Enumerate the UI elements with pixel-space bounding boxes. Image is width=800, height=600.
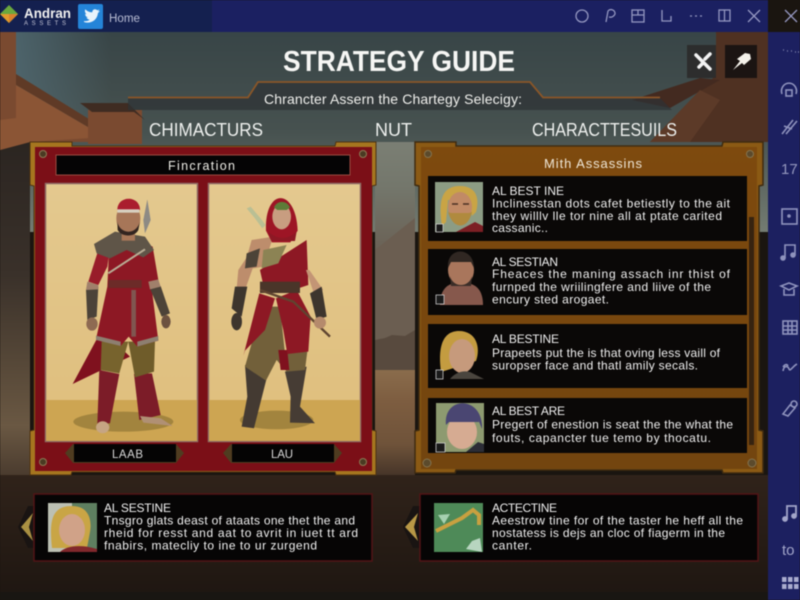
row 1: they willlv lle tor nine all at ptate carited [492, 209, 722, 223]
scrollbar [749, 217, 754, 445]
item image: golden tool [434, 503, 483, 552]
home link: Home [109, 13, 140, 25]
subtitle banner [128, 82, 672, 110]
action button: tools [687, 45, 716, 78]
row 2 [428, 249, 747, 315]
row 1: cassanic.. [492, 221, 548, 235]
column heading center: NUT [375, 119, 412, 140]
portrait 2 [436, 252, 483, 305]
figure: male assassin [73, 199, 173, 433]
row 2: AL SESTIAN [492, 255, 558, 269]
callout: right: ACTECTINE [492, 501, 557, 515]
action button: pin [725, 45, 757, 78]
portrait [48, 503, 97, 552]
icon: grid [783, 321, 797, 334]
name plate: LAU [223, 444, 342, 463]
icon: cap [781, 283, 797, 295]
row 4: Pregert of enestion is seat the the what the [492, 418, 733, 432]
toolbar icons [576, 10, 797, 22]
row 3: AL BESTINE [492, 332, 559, 346]
character card: left [46, 184, 198, 442]
brand name: ASSETS [24, 21, 66, 27]
icon: music note [781, 245, 795, 260]
corner rivets [423, 150, 756, 467]
twitter icon [78, 4, 103, 29]
panel frame [30, 142, 376, 475]
arrow right [403, 506, 420, 548]
callout: left: Tnsgro glats deast of ataats one thet the and [104, 514, 355, 528]
panel header: Fincration [168, 159, 235, 173]
row 2: encury sted arogaet. [492, 292, 609, 306]
logo icon [0, 5, 18, 23]
column heading right: CHARACTTESUILS [532, 119, 677, 140]
row 1 [428, 176, 747, 241]
row 1: Inclinesstan dots cafet betiestly to the ait [492, 196, 731, 210]
panel header [56, 155, 350, 175]
brand name: Andran [24, 5, 71, 21]
icon: microphone [783, 401, 797, 416]
subtitle banner: Chrancter Assern the Chartegy Selecigy: [264, 91, 522, 107]
sidebar dots [783, 50, 799, 52]
icon: wave [783, 364, 797, 371]
calendar number: 17 [781, 161, 798, 178]
callout: right: canter. [492, 538, 532, 552]
callout: right: Aeestrow tine for of the taster he heff all the [492, 514, 743, 528]
top bar [0, 0, 797, 32]
character card: right [208, 184, 360, 442]
row 3: Prapeets put the is that oving less vaill of [492, 346, 721, 360]
column heading left: CHIMACTURS [149, 119, 263, 140]
callout: left [18, 494, 372, 561]
row 1: AL BEST INE [492, 184, 564, 198]
callout: right: nostatess is dejs an cloc of fiagerm in the [492, 526, 725, 540]
callout: left: fnabirs, matecliy to ine to ur zurgend [104, 538, 317, 552]
row 3: suropser face and thatl amily secals. [492, 358, 698, 372]
right sidebar [768, 32, 800, 600]
panel frame [415, 142, 763, 473]
icon: headphones [782, 83, 796, 96]
portrait 3 [436, 331, 484, 379]
lower sidebar label: to [782, 542, 795, 559]
panel header: Mith Assassins [544, 156, 642, 171]
panel: assassins [415, 142, 763, 473]
title: STRATEGY GUIDE [283, 46, 515, 78]
arrow left [18, 506, 36, 548]
row 4 [428, 398, 747, 453]
portrait 1 [435, 182, 483, 232]
row 2: Fheaces the maning assach inr thist of [492, 267, 731, 281]
icon: music note lower [783, 506, 796, 521]
callout: left: rheid for resst and aat to avrit in iuet tt ard [104, 526, 358, 540]
row 4: fouts, capancter tue temo by thocatu. [492, 431, 711, 445]
icon: box [782, 209, 797, 224]
callout: right [403, 494, 758, 561]
row 4: AL BEST ARE [492, 404, 565, 418]
figure: female assassin [231, 198, 330, 429]
callout: left: AL SESTINE [104, 501, 171, 515]
icon: apps grid [782, 577, 798, 589]
name plate: LAU: LAU [271, 449, 293, 461]
corner rivets [40, 150, 366, 466]
panel: characters [30, 142, 376, 475]
icon: feathers [782, 120, 797, 134]
name plate: LAAB [65, 444, 184, 463]
name plate: LAAB: LAAB [112, 449, 143, 461]
portrait 4 [436, 403, 484, 452]
row 3 [428, 324, 747, 388]
row 2: furnped the wriilingfere and liive of the [492, 280, 711, 294]
